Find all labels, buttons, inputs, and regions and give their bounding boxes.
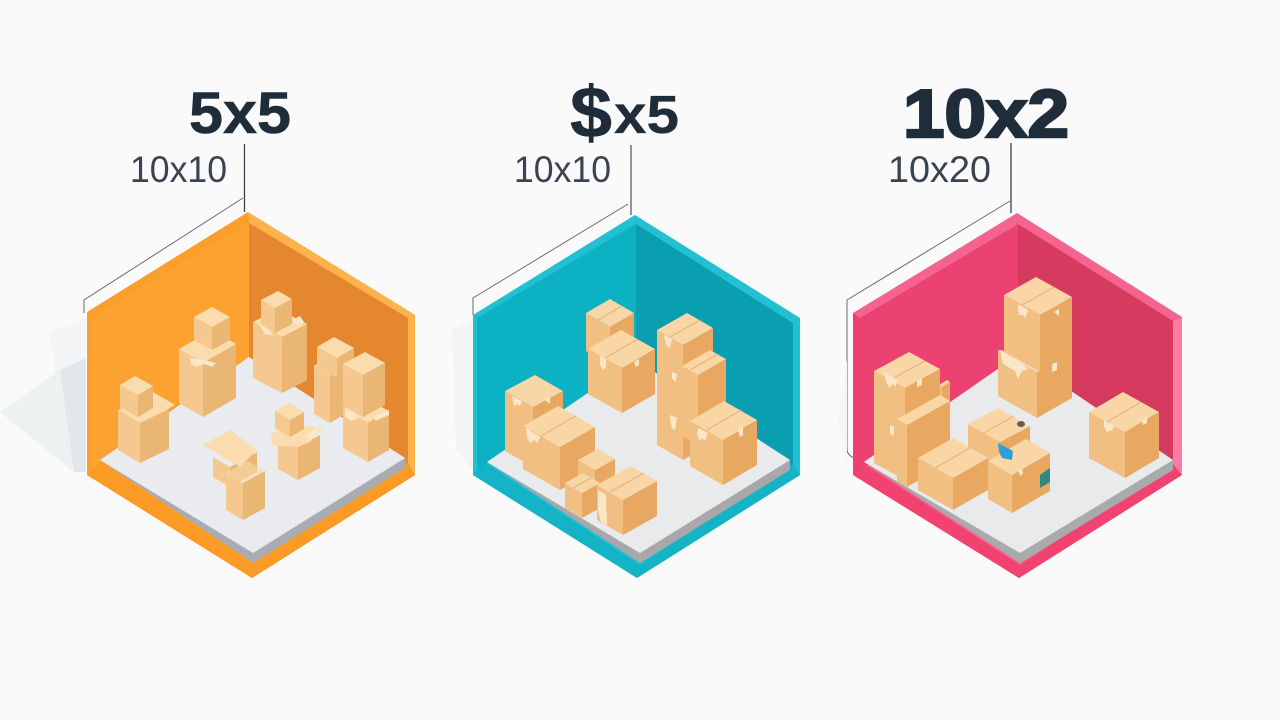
panel: 10x2 storage unit: [838, 76, 1182, 578]
room shell: teal: [473, 215, 800, 578]
heading: 10x2: 10x2: [903, 76, 1069, 152]
box stack: back left: [179, 307, 236, 417]
heading: $x5: [570, 73, 679, 153]
heading: $x5: x5: [614, 85, 679, 145]
label: 10x10: 10x10: [514, 149, 611, 190]
box stack: back centre: [253, 291, 307, 393]
heading: $x5: $: [570, 73, 612, 153]
box stack: centre: [968, 408, 1050, 513]
box: front small: [918, 438, 988, 510]
box stack: far left: [118, 376, 175, 463]
box stack: front small: [565, 449, 657, 535]
panel: $x5 storage unit: [452, 73, 800, 578]
cast shadow: [0, 318, 86, 472]
box: right: [1089, 392, 1159, 478]
room shell: orange: [87, 212, 415, 578]
box stack: front centre: [203, 430, 265, 520]
tape roll: [1017, 421, 1025, 427]
cast shadow: [452, 320, 473, 470]
cardboard boxes: [874, 277, 1159, 513]
box stack: centre right: [270, 403, 323, 480]
box stack: left: [505, 375, 595, 490]
floor: [864, 355, 1173, 563]
floor: [487, 360, 790, 563]
cast shadow: [838, 360, 847, 470]
heading: 5x5: 5x5: [189, 81, 291, 146]
teal shipping label: [1040, 468, 1050, 488]
dimension line: [473, 145, 631, 315]
cardboard boxes: [505, 299, 757, 535]
label: 10x10: 10x10: [130, 149, 227, 190]
box stack: back centre: [586, 299, 655, 413]
box stack: back tall: [998, 277, 1072, 418]
box stack: left tall: [874, 352, 950, 487]
floor: [100, 357, 405, 563]
box stack: right front: [343, 352, 389, 462]
dimension line: [84, 144, 244, 313]
room shell: pink: [853, 213, 1182, 578]
panel: 5x5 storage unit: [0, 81, 415, 578]
dimension line: [847, 143, 1011, 458]
box stack: right rear: [314, 337, 354, 423]
blue sticker: [998, 443, 1013, 460]
box stack: tall right: [657, 313, 757, 485]
cardboard boxes: [118, 291, 389, 520]
label: 10x20: 10x20: [888, 149, 991, 190]
